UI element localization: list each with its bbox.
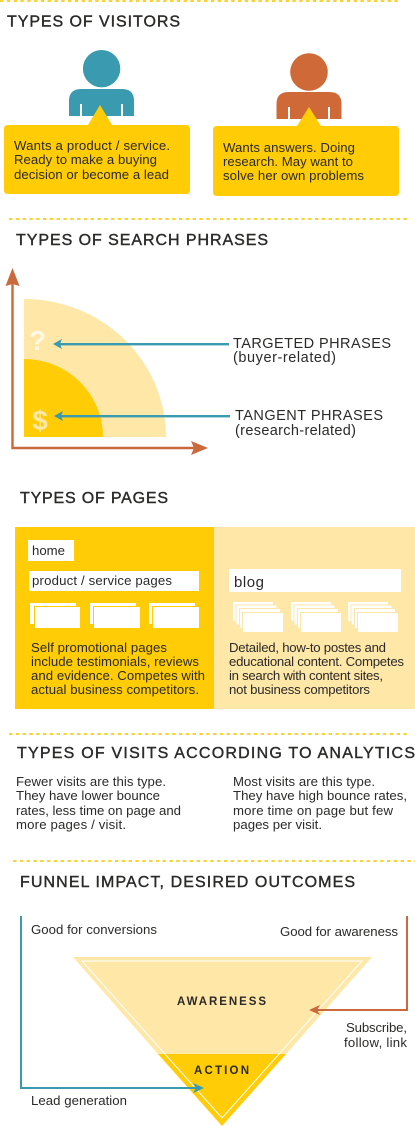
text: fewer visits: rates, less time on page and (16, 803, 181, 818)
product / service box: product / service pages (32, 573, 172, 588)
arrow: lead generation (21, 916, 204, 1093)
blog page stacks (232, 602, 398, 632)
blog box (229, 569, 401, 592)
label: tangent phrases (235, 408, 383, 439)
panel: business pages (15, 527, 214, 709)
chart: search phrases quarter circles (6, 268, 230, 455)
funnel action section (158, 1054, 286, 1126)
icon: dollar sign: $ (32, 405, 48, 436)
text: fewer visits: more pages / visit. (16, 817, 126, 832)
blog pages description: in search with content sites, (229, 668, 383, 683)
outer arc: targeted (24, 299, 166, 437)
blog pages description (229, 640, 404, 697)
callout: wants answers (213, 107, 399, 196)
icon: teal person (69, 50, 134, 116)
callout: wants a product: Ready to make a buying (14, 152, 157, 167)
label: awareness: AWARENESS (177, 996, 266, 1008)
label: targeted phrases (233, 336, 391, 366)
business pages description: and evidence. Competes with (31, 668, 205, 683)
callout: wants answers: Wants answers. Doing (223, 140, 355, 155)
text: most visits: more time on page but few (233, 803, 393, 818)
heading: types of search phrases: TYPES OF SEARCH PHRASES (16, 232, 268, 249)
text: fewer visits (16, 774, 181, 832)
text: good for awareness: Good for awareness (280, 924, 398, 939)
text: fewer visits: They have lower bounce (16, 788, 160, 803)
arrow: targeted (53, 339, 229, 349)
text: most visits (233, 774, 407, 832)
chart: funnel (73, 957, 372, 1126)
business pages description: Self promotional pages (31, 640, 167, 655)
icon: orange person (276, 53, 342, 119)
text: subscribe, follow, link: Subscribe, (346, 1020, 407, 1035)
blog pages description: not business competitors (229, 682, 370, 697)
heading: types of pages: TYPES OF PAGES (20, 490, 168, 507)
text: most visits: Most visits are this type. (233, 774, 375, 789)
product / service box (29, 571, 199, 591)
panel: blog pages (214, 527, 415, 709)
panel: buyer visitor (4, 50, 190, 194)
arrow: subscribe (309, 916, 407, 1015)
panel: researcher visitor (213, 53, 399, 196)
heading: types of visitors: TYPES OF VISITORS (7, 14, 180, 30)
home box: home (32, 543, 65, 558)
text: most visits: pages per visit. (233, 817, 322, 832)
icon: question mark: ? (29, 325, 46, 356)
blog pages description: educational content. Competes (229, 654, 404, 669)
callout: wants a product (4, 105, 190, 194)
label: targeted phrases: (buyer-related) (233, 350, 336, 366)
axes arrows (6, 268, 208, 455)
callout: wants a product: decision or become a lead (14, 167, 169, 182)
label: tangent phrases: (research-related) (235, 423, 356, 439)
heading: funnel impact: FUNNEL IMPACT, DESIRED OUTCOMES (20, 874, 355, 891)
callout: wants answers: research. May want to (223, 154, 353, 169)
text: fewer visits: Fewer visits are this type. (16, 774, 166, 789)
business pages description: include testimonials, reviews (31, 654, 199, 669)
arrow: tangent (54, 411, 230, 421)
blog box: blog (234, 574, 264, 591)
label: action: ACTION (194, 1065, 249, 1077)
label: tangent phrases: TANGENT PHRASES (235, 408, 383, 424)
callout: wants a product: Wants a product / service. (14, 138, 170, 153)
blog pages description: Detailed, how-to postes and (229, 640, 386, 655)
business pages description: actual business competitors. (31, 682, 199, 697)
home box (28, 540, 74, 561)
text: good for conversions: Good for conversions (31, 922, 157, 937)
text: subscribe, follow, link (344, 1020, 407, 1050)
callout: wants answers: solve her own problems (223, 168, 364, 183)
label: targeted phrases: TARGETED PHRASES (233, 336, 391, 352)
text: subscribe, follow, link: follow, link (344, 1035, 407, 1050)
heading: types of visits: TYPES OF VISITS ACCORDING TO ANALYTICS (17, 745, 415, 762)
inner arc: tangent (24, 359, 103, 437)
text: most visits: They have high bounce rates, (233, 788, 407, 803)
text: lead generation: Lead generation (31, 1093, 127, 1108)
funnel awareness section (73, 957, 372, 1054)
page stacks (30, 603, 200, 628)
business pages description (31, 640, 205, 697)
